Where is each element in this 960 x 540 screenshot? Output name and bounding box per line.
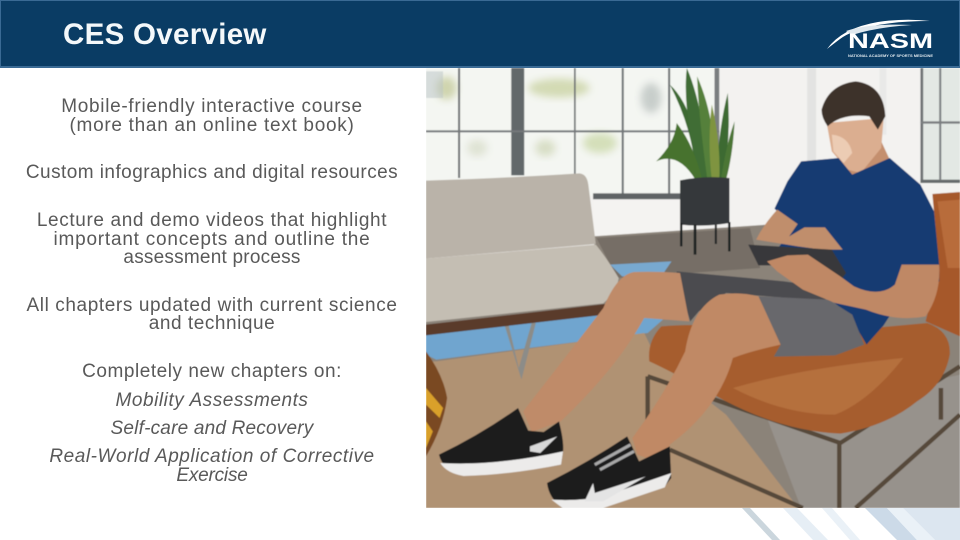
- text: mobile-friendly course: [61, 96, 363, 136]
- text: new chapters list: Exercise: [176, 465, 248, 486]
- far shorts and leg: [677, 271, 828, 321]
- header bar: [0, 0, 960, 68]
- floor: [426, 225, 960, 508]
- logo: NASM: NATIONAL ACADEMY OF SPORTS MEDICINE: [848, 53, 933, 58]
- near arm: [767, 255, 939, 318]
- leather chair: [648, 192, 960, 508]
- text: lecture and demo videos: [37, 210, 387, 268]
- text: chapters updated: and technique: [149, 313, 275, 334]
- striped side chair: [426, 351, 447, 456]
- text: chapters updated: All chapters updated with current science: [26, 295, 398, 316]
- title: CES Overview: [63, 18, 267, 51]
- far arm: [756, 210, 843, 250]
- text: mobile-friendly course: Mobile-friendly interactive course: [61, 96, 363, 117]
- text: lecture and demo videos: important concepts and outline the: [54, 229, 370, 250]
- photo: man using a tablet on a leather chair: [426, 68, 960, 508]
- text: new chapters list: Completely new chapters on:: [82, 361, 342, 382]
- text: mobile-friendly course: (more than an online text book): [70, 115, 354, 136]
- sofa: [426, 173, 619, 380]
- rug: [426, 333, 798, 508]
- tablet: [748, 245, 846, 279]
- right window: [920, 68, 960, 183]
- logo: NASM: NASM: [848, 30, 933, 53]
- shirt: [767, 158, 939, 345]
- text: chapters updated: [26, 295, 398, 334]
- text: new chapters list: Self-care and Recovery: [111, 418, 313, 439]
- text: new chapters list: Mobility Assessments: [116, 390, 308, 411]
- text: new chapters list: [49, 361, 375, 486]
- near shorts and leg: [758, 296, 864, 357]
- logo: NASM: [827, 20, 933, 58]
- text: lecture and demo videos: assessment process: [123, 247, 301, 268]
- decorative diagonal stripes: [742, 508, 960, 540]
- shoes: [439, 408, 672, 508]
- man: [523, 81, 939, 465]
- text: lecture and demo videos: Lecture and demo videos that highlight: [37, 210, 387, 231]
- potted plant: [656, 68, 735, 255]
- window: [426, 68, 719, 199]
- text: new chapters list: Real-World Application of Corrective: [49, 446, 375, 467]
- text: custom infographics: Custom infographics and digital resources: [26, 162, 398, 183]
- neck and face: [844, 141, 890, 176]
